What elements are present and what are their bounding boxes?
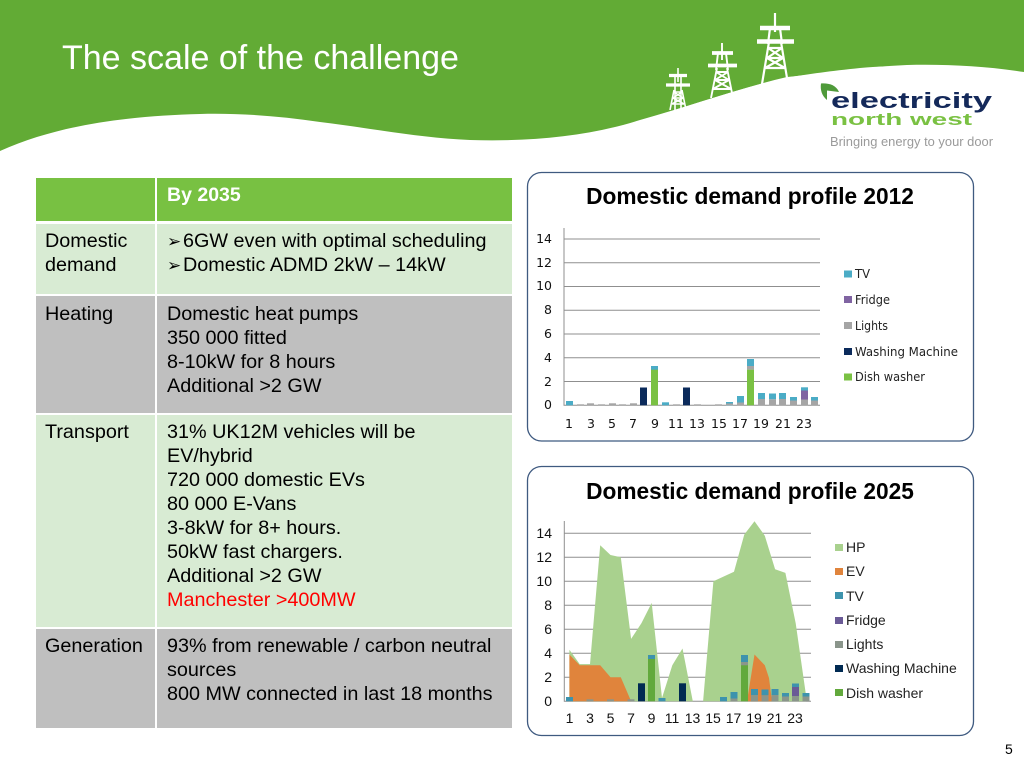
row label heating: Heating [45,303,113,325]
bar chart 2012: 15 [711,416,727,431]
stacked area and bar chart 2025: 21 [767,710,782,726]
bar chart 2012: 9 [651,416,659,431]
bar chart 2012: 4 [544,350,552,365]
bar chart 2012: 17 [732,416,748,431]
bar chart 2012: 2 [544,374,552,389]
area: HP [569,521,806,701]
panel: chart 2012 [528,172,974,441]
row label domestic demand [36,224,155,294]
stacked area and bar chart 2025: 17 [726,710,741,726]
header cell by 2035 [157,178,512,221]
logo leaf [821,83,839,100]
area: EV [569,654,772,701]
row text domestic demand: ➢ [167,232,181,252]
icon: small pylon [666,68,690,110]
bar chart 2012: 0 [544,397,552,412]
row label generation [36,629,155,728]
row text generation [157,629,512,728]
stacked area and bar chart 2025: 4 [544,645,552,661]
legend 2025: Fridge [846,612,886,628]
stacked area and bar chart 2025: 15 [705,710,721,726]
stacked area and bar chart 2025: 2 [544,669,552,685]
logo [821,83,994,149]
row label generation: Generation [45,635,143,657]
bar chart 2012: 7 [629,416,637,431]
title: The scale of the challenge [62,39,459,77]
stacked area and bar chart 2025: 1 [566,710,574,726]
legend 2012: TV [854,266,870,281]
header cell blank [36,178,155,221]
page number: 5 [1005,741,1013,757]
bar chart 2012: 10 [536,278,552,293]
row text domestic demand [157,224,512,294]
legend 2025: Dish washer [846,685,923,701]
legend 2012: Washing Machine [855,344,958,359]
stacked area and bar chart 2025: 23 [787,710,803,726]
row text transport: 31% UK12M vehicles will be EV/hybrid 720 000 domestic EVs 80 000 E-Vans 3-8kW for 8+ hours. 50kW fast chargers. Additional >2 GW Manchester >400MW [167,421,415,611]
stacked area and bar chart 2025: 11 [665,710,679,726]
stacked area and bar chart 2025: 10 [536,573,552,589]
legend 2012: Fridge [855,292,890,307]
row label transport: Transport [45,421,129,443]
stacked area and bar chart 2025: 7 [627,710,635,726]
row label domestic demand: Domestic demand [45,230,127,276]
stacked area and bar chart 2025: 5 [607,710,615,726]
stacked area and bar chart 2025: 13 [685,710,700,726]
bar chart 2012: 21 [775,416,791,431]
bar chart 2012: 5 [608,416,616,431]
stacked area and bar chart 2025: 0 [544,693,552,709]
stacked area and bar chart 2025: 14 [536,525,552,541]
row text heating [157,296,512,413]
row text domestic demand: ➢ [167,256,181,276]
stacked area and bar chart 2025: 9 [648,710,656,726]
bar chart 2012: 6 [544,326,552,341]
row text transport [157,415,512,627]
logo wordmark electricity: electricity [831,88,993,113]
legend 2025: Washing Machine [846,660,957,676]
panel border [528,466,974,736]
header cell by 2035: By 2035 [167,184,241,206]
bar chart 2012: 13 [689,416,705,431]
bar chart 2012: 3 [587,416,595,431]
legend 2025 [835,539,957,701]
stacked area and bar chart 2025: 12 [536,549,552,565]
legend 2025: HP [846,539,865,555]
panel: chart 2025 [528,466,974,736]
bar chart 2012: 14 [536,231,552,246]
legend 2025: TV [846,588,865,604]
stacked area and bar chart 2025: 3 [586,710,594,726]
row label transport [36,415,155,627]
stacked area and bar chart 2025: 19 [746,710,762,726]
chart title: Domestic demand profile 2012 [586,183,914,209]
icon: large pylon [757,13,794,84]
row text generation: 93% from renewable / carbon neutral sources 800 MW connected in last 18 months [167,635,492,705]
logo strapline: Bringing energy to your door [830,134,994,149]
chart title: Domestic demand profile 2025 [586,478,914,504]
row text heating: Domestic heat pumps 350 000 fitted 8-10kW for 8 hours Additional >2 GW [167,303,358,397]
legend 2025: Lights [846,636,883,652]
bar chart 2012: 19 [753,416,769,431]
panel: table [36,178,512,728]
legend 2012: Dish washer [855,369,926,384]
panel border [528,172,974,441]
bar chart 2012: 11 [668,416,684,431]
stacked area and bar chart 2025: 6 [544,621,552,637]
logo wordmark north west: north west [831,110,973,129]
stacked area and bar chart 2025: 8 [544,597,552,613]
stacked area and bar chart 2025 [536,521,811,726]
row label heating [36,296,155,413]
bar chart 2012 [536,228,820,431]
bar chart 2012: 8 [544,302,552,317]
legend 2025: EV [846,563,865,579]
icon: medium pylon [708,43,737,98]
legend 2012 [844,266,958,384]
bar chart 2012: 1 [565,416,573,431]
row text domestic demand: 6GW even with optimal scheduling Domestic ADMD 2kW – 14kW [183,230,486,276]
legend 2012: Lights [855,318,888,333]
bar chart 2012: 23 [796,416,812,431]
green header swoosh [0,0,1024,151]
white hill covering pylon feet [640,66,1000,140]
bar chart 2012: 12 [536,255,552,270]
